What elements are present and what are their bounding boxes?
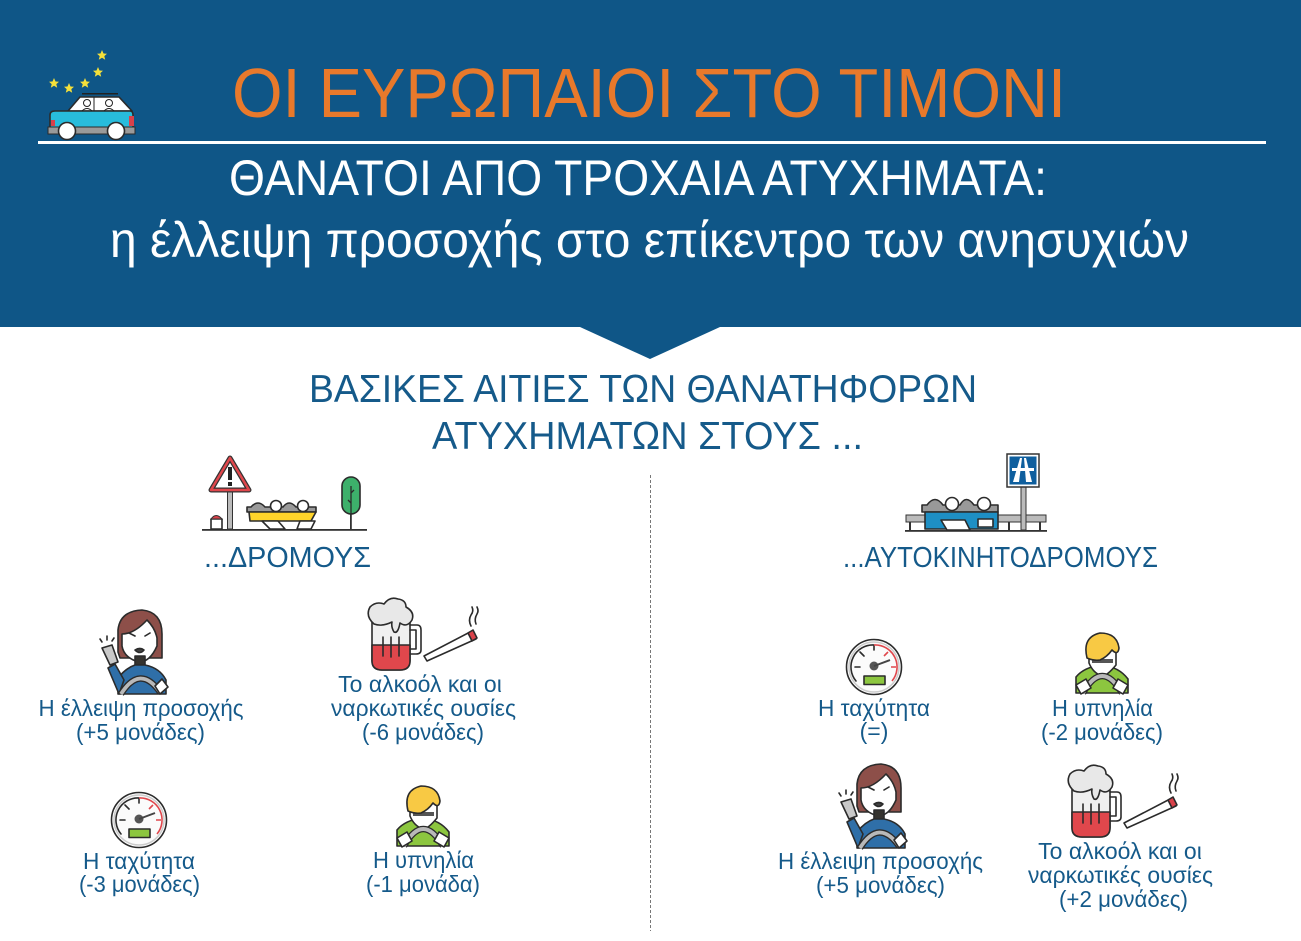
label: inattention: (+5 μονάδες) — [816, 872, 945, 898]
label: drowsiness: Η υπνηλία — [373, 847, 474, 873]
subtitle — [110, 150, 1189, 268]
label: speed: (=) — [860, 718, 888, 744]
label: alcohol and drugs: (+2 μονάδες) — [1059, 886, 1188, 912]
label: inattention: Η έλλειψη προσοχής — [38, 695, 244, 721]
item: speed — [818, 640, 930, 744]
panel: roads — [38, 458, 516, 897]
icon: speedometer — [846, 640, 902, 694]
subtitle: ΘΑΝΑΤΟΙ ΑΠΟ ΤΡΟΧΑΙΑ ΑΤΥΧΗΜΑΤΑ: — [229, 150, 1047, 206]
section heading — [309, 368, 977, 458]
item: alcohol and drugs — [1028, 765, 1213, 912]
icon: beer and cigarette — [368, 598, 478, 670]
header banner — [0, 0, 1301, 359]
icon: woman on phone — [100, 610, 168, 694]
label: speed: (-3 μονάδες) — [79, 871, 200, 897]
centre divider — [650, 475, 652, 931]
icon: speedometer — [112, 792, 166, 848]
item: speed — [79, 792, 200, 897]
panel: motorways — [778, 454, 1213, 912]
title: ΟΙ ΕΥΡΩΠΑΙΟΙ ΣΤΟ ΤΙΜΟΝΙ — [232, 54, 1066, 132]
item: alcohol and drugs — [331, 598, 516, 745]
section heading: ΒΑΣΙΚΕΣ ΑΙΤΙΕΣ ΤΩΝ ΘΑΝΑΤΗΦΟΡΩΝ — [309, 368, 977, 411]
icon: car with stars — [48, 50, 135, 140]
label: alcohol and drugs: Το αλκοόλ και οι — [1038, 838, 1202, 864]
item: drowsiness — [1041, 633, 1163, 745]
icon: woman on phone — [839, 764, 907, 848]
icon: motorway sign and overturned car — [905, 454, 1047, 532]
label: alcohol and drugs: ναρκωτικές ουσίες — [331, 695, 516, 721]
label: inattention: (+5 μονάδες) — [76, 719, 205, 745]
item: inattention — [778, 764, 983, 898]
label: inattention: Η έλλειψη προσοχής — [778, 848, 983, 874]
label: drowsiness: (-2 μονάδες) — [1041, 719, 1163, 745]
label: alcohol and drugs: ναρκωτικές ουσίες — [1028, 862, 1213, 888]
icon: sleeping driver — [1076, 633, 1128, 694]
label: drowsiness: Η υπνηλία — [1052, 695, 1153, 721]
label: alcohol and drugs: Το αλκοόλ και οι — [338, 671, 502, 697]
heading: roads: ...ΔΡΟΜΟΥΣ — [204, 542, 371, 574]
label: speed: Η ταχύτητα — [818, 695, 930, 721]
header divider — [38, 141, 1266, 144]
label: speed: Η ταχύτητα — [83, 848, 195, 874]
item: inattention — [38, 610, 244, 745]
label: drowsiness: (-1 μονάδα) — [366, 871, 480, 897]
icon: beer and cigarette — [1068, 765, 1178, 837]
section heading: ΑΤΥΧΗΜΑΤΩΝ ΣΤΟΥΣ ... — [432, 415, 863, 458]
label: alcohol and drugs: (-6 μονάδες) — [362, 719, 484, 745]
item: drowsiness — [366, 786, 480, 897]
heading: motorways: ...ΑΥΤΟΚΙΝΗΤΟΔΡΟΜΟΥΣ — [843, 542, 1158, 574]
icon: sleeping driver — [397, 786, 449, 847]
icon: warning sign, overturned car and tree — [202, 458, 367, 531]
subtitle: η έλλειψη προσοχής στο επίκεντρο των ανησυχιών — [110, 212, 1189, 268]
